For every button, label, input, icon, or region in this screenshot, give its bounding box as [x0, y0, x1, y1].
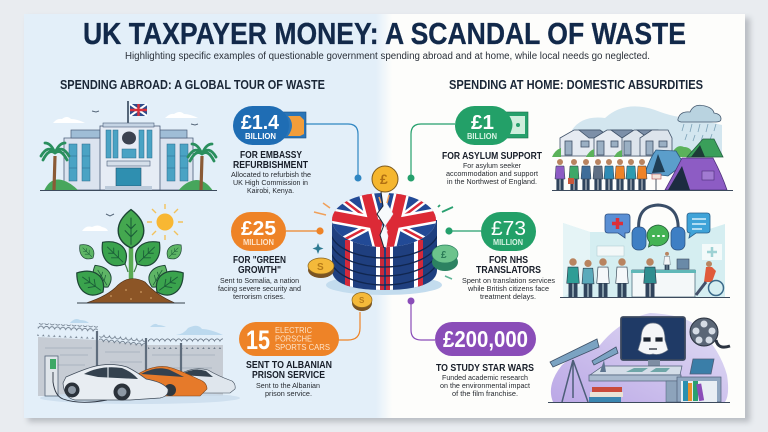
text: study Star Wars: on the environmental impact — [440, 383, 530, 390]
stat: £1.4 billion pill with banknote: BILLION — [245, 132, 276, 141]
text: Albanian prison service: PRISON SERVICE — [252, 370, 325, 381]
subtitle: Highlighting specific examples of questionable government spending abroad and at home, while local needs go neglected. — [125, 51, 650, 62]
illustration: embassy building — [40, 101, 217, 191]
text: NHS translators: treatment delays. — [480, 294, 536, 301]
stat: £1.4 billion pill with banknote — [233, 106, 306, 145]
coin: bottom gold — [352, 292, 372, 311]
panel: left background — [24, 14, 386, 418]
text: green growth: GROWTH" — [238, 265, 281, 276]
stat: £25 million pill: MILLION — [243, 238, 274, 247]
coin: right green — [432, 245, 458, 271]
coin: left gold: S — [317, 262, 324, 273]
stat: £200,000 pill: £200,000 — [443, 326, 528, 352]
stat: 15 electric Porsche sports cars pill: 15 — [246, 325, 270, 355]
text: asylum support: accommodation and support — [446, 171, 538, 178]
text: study Star Wars: TO STUDY STAR WARS — [436, 363, 534, 374]
stat: 15 electric Porsche sports cars pill: ELECTRIC — [275, 325, 312, 335]
illustration: prison wall and electric cars — [37, 319, 240, 404]
coin: left gold — [308, 258, 334, 278]
stat: £200,000 pill — [435, 322, 536, 356]
coin: top gold: £ — [380, 171, 388, 187]
coin: bottom gold: S — [359, 296, 365, 305]
text: study Star Wars: Funded academic research — [442, 375, 528, 382]
connector: porsche to stack — [338, 312, 360, 340]
text: embassy refurbishment — [231, 150, 311, 195]
stat: £1 billion pill with banknote: £1 — [471, 112, 494, 134]
coin: right green: £ — [441, 250, 447, 261]
text: study Star Wars: of the film franchise. — [452, 391, 518, 398]
text: NHS translators: while British citizens face — [467, 286, 549, 293]
text: NHS translators: Spent on translation services — [462, 278, 556, 285]
heading: spending at home: SPENDING AT HOME: DOMESTIC ABSURDITIES — [449, 78, 703, 92]
coin: top gold — [372, 166, 398, 192]
stat: £25 million pill: £25 — [241, 218, 276, 240]
text: green growth: Sent to Somalia, a nation — [220, 278, 299, 285]
stat: £73 million pill — [481, 212, 536, 251]
text: embassy refurbishment: REFURBISHMENT — [233, 160, 308, 171]
text: green growth — [218, 255, 301, 301]
stat: £1.4 billion pill with banknote: £1.4 — [241, 112, 280, 134]
connector: translators to stack — [445, 227, 481, 235]
connector: asylum to stack — [408, 124, 455, 182]
text: asylum support — [442, 151, 542, 186]
text: green growth: facing severe security and — [218, 286, 301, 293]
text: Albanian prison service: prison service. — [265, 391, 312, 398]
stat: 15 electric Porsche sports cars pill: PORSCHE — [275, 334, 312, 344]
stat: £1 billion pill with banknote — [455, 106, 528, 145]
text: asylum support: FOR ASYLUM SUPPORT — [442, 151, 542, 162]
text: study Star Wars — [436, 363, 534, 398]
connector: star wars to stack — [408, 298, 435, 340]
text: embassy refurbishment: FOR EMBASSY — [240, 150, 302, 161]
text: embassy refurbishment: UK High Commission in — [233, 180, 308, 187]
connector: embassy to stack — [306, 124, 362, 182]
stat: 15 electric Porsche sports cars pill — [239, 322, 339, 356]
text: Albanian prison service: Sent to the Albanian — [256, 383, 320, 390]
central graphic: broken UK flag coin stack — [312, 188, 453, 295]
text: Albanian prison service — [246, 360, 332, 398]
text: embassy refurbishment: Allocated to refurbish the — [231, 172, 311, 179]
panel: right background — [376, 14, 745, 418]
connector: green growth to stack — [286, 227, 324, 235]
text: NHS translators: FOR NHS — [489, 255, 528, 266]
text: embassy refurbishment: Kairobi, Kenya. — [247, 188, 294, 195]
text: green growth: terrorism crises. — [233, 294, 285, 301]
text: asylum support: For asylum seeker — [463, 163, 522, 170]
text: green growth: FOR "GREEN — [233, 255, 286, 266]
title: UK TAXPAYER MONEY: A SCANDAL OF WASTE — [83, 16, 686, 51]
panel divider fade — [376, 14, 392, 418]
illustration: NHS translators in hospital — [560, 205, 730, 298]
stat: £73 million pill: MILLION — [493, 238, 523, 247]
heading: spending abroad: SPENDING ABROAD: A GLOBAL TOUR OF WASTE — [60, 78, 325, 92]
illustration: Star Wars research desk — [548, 313, 730, 402]
text: NHS translators — [462, 255, 556, 301]
stat: 15 electric Porsche sports cars pill: SPORTS CARS — [275, 342, 330, 352]
stat: £25 million pill — [231, 212, 286, 251]
text: NHS translators: TRANSLATORS — [476, 265, 541, 276]
text: Albanian prison service: SENT TO ALBANIAN — [246, 360, 332, 371]
illustration: green plant — [70, 204, 190, 303]
illustration: asylum housing, queue and tents — [552, 105, 733, 190]
stat: £73 million pill: £73 — [491, 218, 526, 240]
text: asylum support: in the Northwest of England. — [447, 179, 537, 186]
stat: £1 billion pill with banknote: BILLION — [467, 132, 497, 141]
